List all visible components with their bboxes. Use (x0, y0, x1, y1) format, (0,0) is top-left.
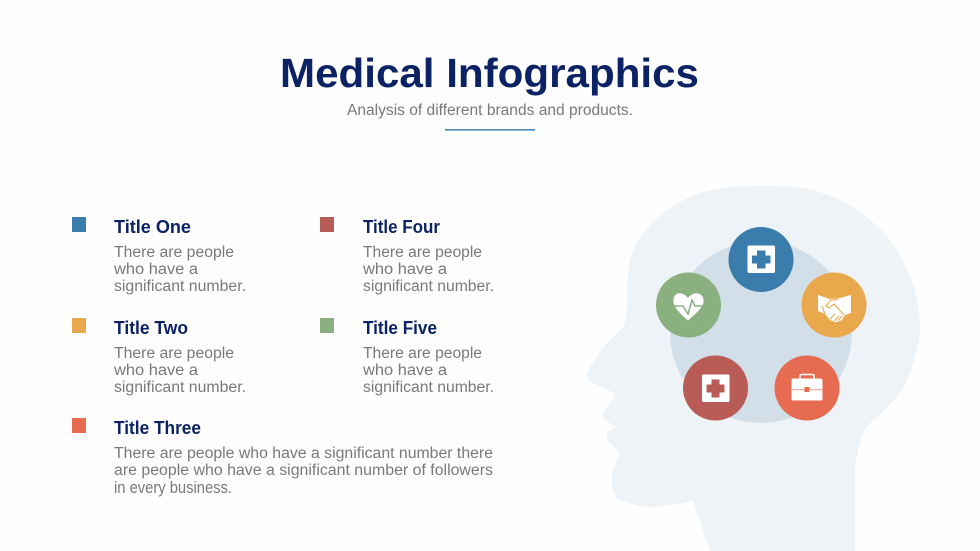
title: Medical Infographics (280, 50, 699, 96)
item: Title Two: Title Two (114, 317, 188, 338)
large pale circle (670, 241, 852, 423)
icon: first aid box (red) (683, 356, 748, 420)
item: Title One: Title One (114, 216, 191, 237)
item: Title Five: who have a (362, 362, 447, 379)
item: Title Three: in every business. (114, 479, 232, 497)
title underline (445, 129, 535, 131)
item: Title Four (320, 216, 494, 295)
item: Title One: who have a (113, 261, 198, 278)
item: Title Five: Title Five (363, 317, 437, 338)
item: Title Three: are people who have a significant number of followers (114, 462, 493, 479)
icon: heart with pulse (green) (656, 272, 721, 338)
subtitle: Analysis of different brands and products. (347, 102, 633, 119)
icon: medical box (blue) (728, 227, 794, 292)
item: Title Two: who have a (113, 362, 198, 379)
item: Title Three: There are people who have a significant number there (114, 445, 493, 462)
item: Title Three: Title Three (114, 417, 201, 438)
item: Title One (72, 216, 246, 295)
icon: briefcase (coral) (774, 356, 840, 420)
head silhouette (587, 186, 920, 551)
item: Title Four: There are people (363, 244, 482, 261)
item: Title Four: significant number. (363, 278, 494, 295)
item: Title Five: significant number. (363, 379, 494, 396)
item: Title Three (72, 417, 493, 497)
item: Title Five: There are people (363, 345, 482, 362)
item: Title Four: who have a (362, 261, 447, 278)
item: Title Five (320, 317, 494, 396)
item: Title Two: There are people (114, 345, 234, 362)
item: Title One: There are people (114, 244, 234, 261)
icon: handshake (orange) (802, 272, 866, 338)
item: Title Four: Title Four (363, 216, 440, 237)
item: Title One: significant number. (114, 278, 246, 295)
item: Title Two (72, 317, 246, 396)
item: Title Two: significant number. (114, 379, 246, 396)
